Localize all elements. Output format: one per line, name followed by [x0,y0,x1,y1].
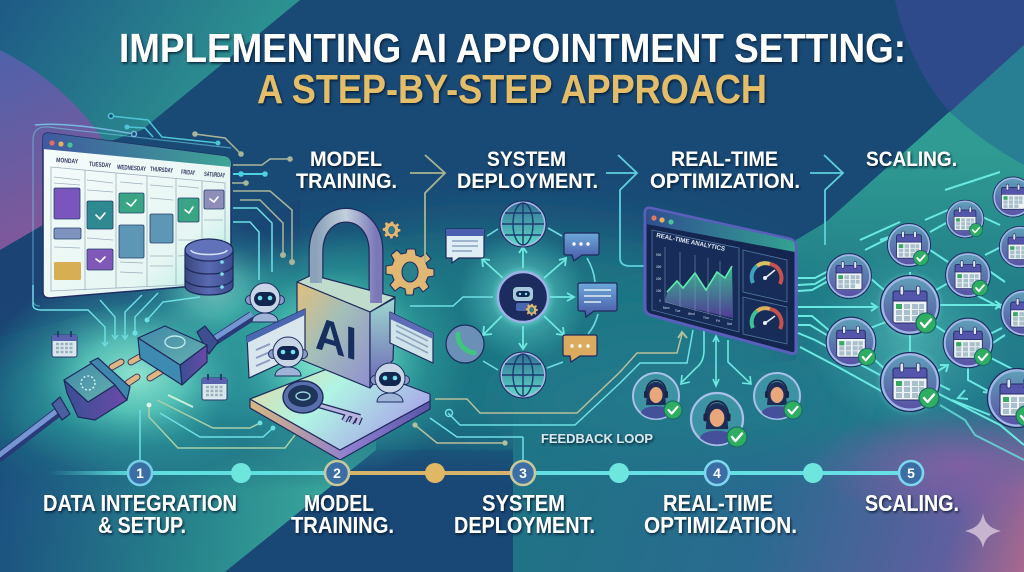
label: data integration [43,490,237,538]
weekday labels: WEDNESDAY [117,164,147,173]
label: data integration: DATA INTEGRATION [43,490,237,516]
chart panel: 100 [656,289,662,293]
label: system deployment: DEPLOYMENT. [457,170,598,193]
step 4 [705,461,729,485]
panel: weekly calendar [33,127,231,306]
label: model training [296,148,397,193]
agents with checks [633,373,802,447]
weekday labels: TUESDAY [89,161,112,170]
label: system deployment [457,148,598,193]
calendar node 2 [946,200,984,238]
chart panel: Mon [663,306,670,310]
title line 1: IMPLEMENTING AI APPOINTMENT SETTING: [119,25,906,71]
label: real-time optimization [650,148,800,193]
label: system deployment [454,490,595,538]
browser window left [247,309,305,378]
label: data integration: & SETUP. [98,512,186,538]
gauge panel 2 [743,297,787,344]
collar [52,397,70,420]
glow: scaling cluster [810,250,1010,430]
plug side [180,345,207,385]
lock front [297,282,370,388]
icon: phone [446,325,484,363]
key [283,381,360,424]
calendar header [43,133,231,167]
plug band [90,358,130,400]
label: real-time optimization: REAL-TIME [671,148,778,171]
ring segments [483,228,598,370]
bubble: chat top right [564,233,599,261]
icon: database [185,239,233,295]
calendar node 12 [988,368,1024,428]
calendar node 4 [827,254,871,298]
globe top [500,201,546,247]
calendar node 3 [999,226,1024,268]
shackle [316,215,376,302]
bubble: message right [578,283,617,317]
lock side [370,298,395,388]
chart panel: 300 [656,265,662,269]
label: real-time optimization [644,490,797,538]
step 3 [511,461,535,485]
gauge panel 1 [743,250,787,302]
connector dots [231,463,823,483]
weekday labels: SATURDAY [204,171,226,179]
timeline line [50,471,900,475]
browser window right [390,312,433,363]
label: real-time optimization: REAL-TIME [663,490,773,516]
prongs [131,353,147,362]
AI label: AI [315,306,357,370]
robot 2 [268,337,308,376]
icon: sparkle [965,513,1001,548]
label: real-time optimization: OPTIMIZATION. [650,170,800,193]
top labels [296,148,957,193]
label: model training: MODEL [310,148,382,171]
label: real-time optimization: OPTIMIZATION. [644,512,797,538]
chart panel: Thu [703,316,709,320]
chart panel: REAL-TIME ANALYTICS [656,232,726,253]
panel: model training padlock [246,215,434,460]
glow: lock [200,230,470,480]
chart panel: Tue [675,309,681,313]
scaling network connectors [798,172,1024,460]
scaling calendar network [826,177,1024,428]
icon: left plug [0,358,137,458]
feedback loop label: FEEDBACK LOOP [541,432,653,446]
bubble: chat gold [563,335,597,362]
globe bottom [500,352,546,398]
icon: small calendar center [202,374,227,400]
step 2: 2 [333,465,341,481]
chart panel: 500 [656,253,662,257]
label: scaling: SCALING. [866,148,957,171]
weekday labels: THURSDAY [150,166,174,175]
step 5 [899,461,923,485]
label: system deployment: SYSTEM [487,148,566,171]
robot 3 [370,363,410,402]
glow: hub [458,232,588,362]
arrow: optimization to scaling [810,155,843,245]
circuit lines: lower left and center [147,297,693,448]
plug top [64,363,115,402]
title line 2: A STEP-BY-STEP APPROACH [257,66,767,112]
step 1 [128,461,152,485]
label: scaling: SCALING. [865,490,959,516]
step 1: 1 [136,465,144,481]
title [119,25,906,112]
agent 1 [633,373,682,419]
chart panel: Wed [688,312,695,316]
arrow: training to deployment [410,155,445,262]
label: model training: TRAINING. [296,170,397,193]
timeline [50,410,923,485]
gear small [382,221,401,239]
robot 1 [246,283,284,322]
calendar node 10 [943,318,993,368]
hub: robot centre [495,269,551,325]
weekday labels [56,157,226,179]
chart panel: Fri [716,319,720,323]
label: system deployment: SYSTEM [482,490,565,516]
prongs [112,362,121,367]
label: model training: MODEL [304,490,374,516]
calendar node 8 center [880,275,940,335]
label: model training [291,490,394,538]
plug band [138,338,182,385]
calendar node 9 [826,317,876,367]
cable [212,316,252,342]
step 4: 4 [713,465,721,481]
calendar grid [51,167,225,291]
plug top [138,326,207,365]
calendar node 7 [1001,290,1024,336]
shackle legs [316,272,376,303]
data flow arrows into plugs [33,285,200,346]
hub arrows [482,247,574,349]
calendar node 6 [946,253,990,297]
agent 2 [691,393,747,447]
bubble: document [446,229,484,263]
agent 3 [754,373,802,419]
panel: real-time analytics dashboard [645,208,796,354]
collar [197,326,218,354]
chart panel: 0 [659,299,661,303]
calendar node 11 [880,352,940,412]
feedback arrows under dashboard [681,330,751,386]
panel: system deployment hub [446,201,617,398]
dashboard header [646,209,795,252]
calendar node 1 [993,177,1024,217]
gear large [386,249,434,295]
icon: small calendar left [52,331,77,357]
icon: right plug [131,314,252,385]
step 5: 5 [907,465,915,481]
calendar frame [43,133,231,298]
calendar node 5 [887,223,931,267]
bottom labels [43,490,959,538]
platform [250,399,430,460]
chart panel [652,230,739,332]
label: model training: TRAINING. [291,512,394,538]
dashboard frame [645,208,796,354]
arrows between top labels [410,155,843,266]
chart panel: 200 [656,277,662,281]
glow: data integration [0,270,285,480]
label: system deployment: DEPLOYMENT. [454,512,595,538]
calendar events [54,188,224,280]
circuit lines: upper left [35,114,295,280]
chart panel: Sat [727,322,733,326]
cable [0,412,58,458]
lock top [297,275,395,312]
weekday labels: FRIDAY [181,169,196,177]
step 3: 3 [519,465,527,481]
plug side [64,380,127,420]
weekday labels: MONDAY [56,157,79,166]
glow: calendar corner [130,220,300,360]
arrow: deployment to optimization [606,155,646,266]
step 2 [325,461,349,485]
